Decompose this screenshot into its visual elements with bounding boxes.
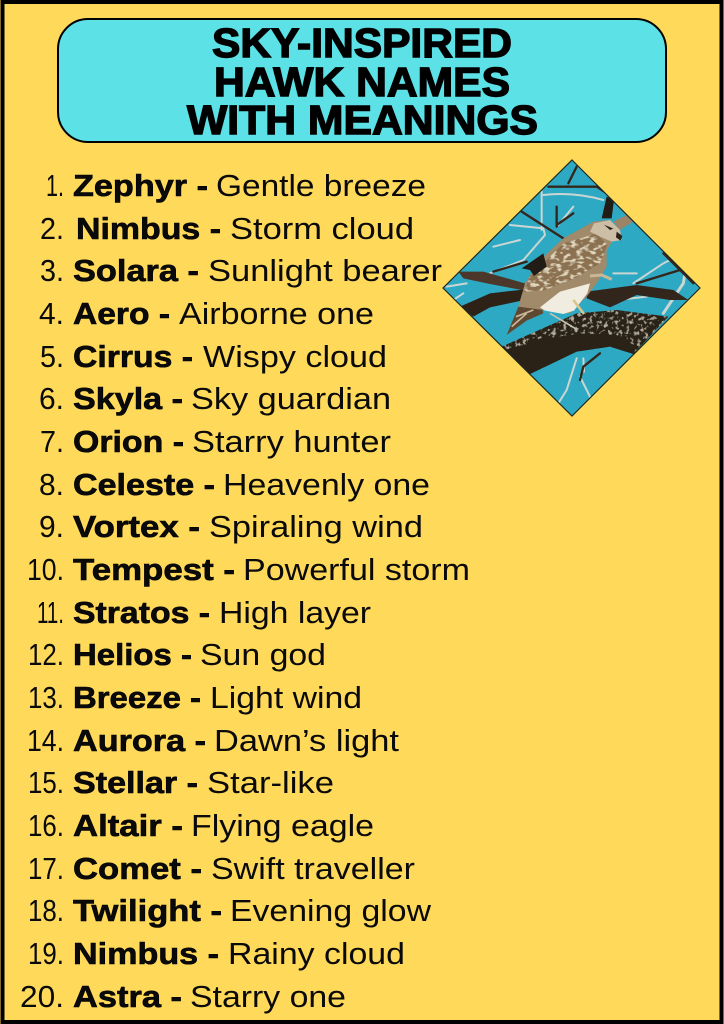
row 11 [37, 596, 371, 630]
names list [20, 169, 470, 1014]
row 20: Astra - [73, 980, 182, 1014]
row 2 [40, 212, 414, 246]
row 10: Powerful storm [243, 553, 470, 587]
row 9 [39, 510, 423, 544]
title text: SKY-INSPIRED [212, 20, 512, 66]
row 20: 20. [20, 980, 64, 1014]
row 7 [40, 425, 391, 459]
row 20 [20, 980, 346, 1014]
row 13: Light wind [210, 681, 362, 715]
title box [58, 19, 666, 142]
row 6: Sky guardian [191, 382, 391, 416]
row 8: Heavenly one [223, 468, 430, 502]
row 9: Vortex - [73, 510, 200, 544]
row 10: 10. [27, 553, 64, 587]
row 18: Twilight - [73, 894, 222, 928]
row 17: Comet - [73, 852, 202, 886]
row 3: Sunlight bearer [208, 254, 442, 288]
row 7: 7. [40, 425, 64, 459]
row 14 [27, 724, 400, 758]
row 9: Spiraling wind [209, 510, 423, 544]
row 2: Storm cloud [230, 212, 414, 246]
row 8: 8. [39, 468, 64, 502]
row 15 [28, 766, 334, 800]
row 1: Gentle breeze [216, 169, 426, 203]
row 8: Celeste - [73, 468, 215, 502]
row 6: Skyla - [73, 382, 183, 416]
row 9: 9. [39, 510, 64, 544]
hawk wing [523, 233, 607, 292]
hawk body [518, 220, 622, 313]
row 16 [28, 809, 374, 843]
row 1: 1. [46, 169, 64, 203]
hawk white belly [540, 283, 590, 314]
row 19 [28, 937, 405, 971]
row 4 [39, 297, 374, 331]
row 4: Aero - [73, 297, 170, 331]
trunk branch [502, 310, 668, 374]
row 10: Tempest - [73, 553, 235, 587]
row 14: 14. [27, 724, 64, 758]
row 4: 4. [39, 297, 64, 331]
pale background twigs [447, 192, 685, 403]
hawk tail [507, 307, 543, 335]
row 5: Cirrus - [73, 340, 193, 374]
row 17: 17. [28, 852, 64, 886]
row 13: Breeze - [73, 681, 201, 715]
row 15: Star-like [207, 766, 334, 800]
row 17 [28, 852, 415, 886]
row 16: Altair - [73, 809, 183, 843]
row 10 [27, 553, 470, 587]
hawk foot and legs [590, 275, 612, 279]
row 6: 6. [39, 382, 64, 416]
row 3: 3. [40, 254, 64, 288]
main branches behind the bird [458, 272, 525, 291]
row 3: Solara - [73, 254, 199, 288]
row 7: Orion - [73, 425, 184, 459]
title banner [58, 19, 666, 143]
row 11: Stratos - [73, 596, 210, 630]
row 4: Airborne one [179, 297, 374, 331]
row 2: Nimbus - [76, 212, 221, 246]
row 18 [28, 894, 432, 928]
row 19: Nimbus - [73, 937, 219, 971]
row 18: 18. [28, 894, 64, 928]
branch stub behind the head [602, 197, 614, 218]
row 18: Evening glow [230, 894, 432, 928]
row 13: 13. [28, 681, 64, 715]
trunk shaded underside [505, 333, 637, 374]
row 7: Starry hunter [192, 425, 391, 459]
row 16: 16. [28, 809, 64, 843]
row 13 [28, 681, 362, 715]
row 15: 15. [28, 766, 64, 800]
row 20: Starry one [190, 980, 346, 1014]
row 1: Zephyr - [73, 169, 208, 203]
title text [187, 20, 538, 143]
dark thin branches [493, 167, 693, 380]
title text: HAWK NAMES [214, 59, 510, 105]
row 3 [40, 254, 442, 288]
row 1 [46, 169, 426, 203]
row 8 [39, 468, 430, 502]
row 14: Dawn’s light [214, 724, 400, 758]
row 14: Aurora - [73, 724, 206, 758]
row 11: High layer [219, 596, 371, 630]
row 6 [39, 382, 391, 416]
row 11: 11. [37, 596, 64, 630]
row 15: Stellar - [73, 766, 198, 800]
row 5: Wispy cloud [203, 340, 387, 374]
row 17: Swift traveller [211, 852, 415, 886]
row 19: 19. [28, 937, 64, 971]
title text: WITH MEANINGS [187, 97, 538, 143]
row 12: Helios - [73, 638, 192, 672]
photo: hawk on a branch in a diamond frame [442, 159, 701, 417]
row 2: 2. [40, 212, 64, 246]
row 16: Flying eagle [191, 809, 374, 843]
row 12: Sun god [200, 638, 326, 672]
hawk dark wing patch [522, 253, 547, 276]
row 12 [28, 638, 326, 672]
row 12: 12. [28, 638, 64, 672]
hawk head [590, 220, 622, 242]
row 19: Rainy cloud [228, 937, 405, 971]
row 5 [40, 340, 387, 374]
row 5: 5. [40, 340, 64, 374]
